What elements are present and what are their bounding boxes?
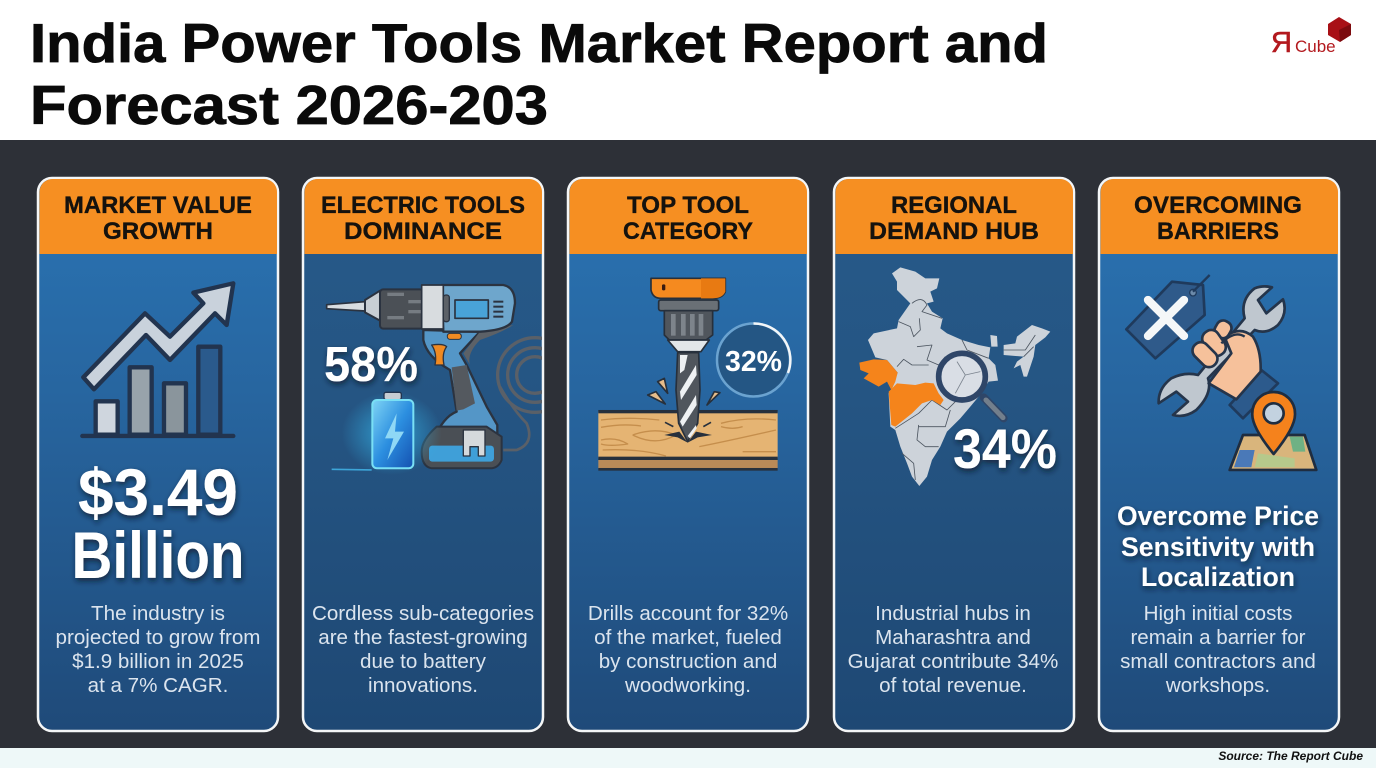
title: India Power Tools Market Report and: [30, 12, 1048, 74]
description: The industry is: [91, 602, 225, 625]
panel header: [1100, 179, 1338, 254]
stat: 58%: 58%: [324, 338, 418, 392]
description: of total revenue.: [879, 674, 1027, 697]
logo: [1271, 17, 1351, 59]
description: woodworking.: [624, 674, 751, 697]
logo: Я: [1271, 27, 1292, 59]
heading: [321, 192, 525, 245]
callout heading: Sensitivity with: [1121, 532, 1315, 562]
heading: CATEGORY: [623, 218, 753, 245]
panel: overcoming barriers: [1099, 178, 1339, 731]
dark panel background: [0, 140, 1376, 748]
title: Forecast 2026-203: [30, 74, 548, 136]
stat: 34%: 34%: [953, 417, 1057, 480]
description: [848, 602, 1058, 697]
heading: DOMINANCE: [344, 218, 502, 245]
description: projected to grow from: [56, 626, 260, 649]
big value: Billion: [72, 518, 244, 592]
heading: DEMAND HUB: [869, 218, 1039, 245]
description: are the fastest-growing: [318, 626, 528, 649]
description: [1120, 602, 1316, 697]
callout heading: Localization: [1141, 562, 1295, 592]
description: [56, 602, 260, 697]
heading: REGIONAL: [891, 192, 1017, 219]
source note: Source: The Report Cube: [1218, 749, 1363, 763]
description: by construction and: [599, 650, 777, 673]
description: Gujarat contribute 34%: [848, 650, 1058, 673]
panel header: [836, 179, 1073, 254]
description: High initial costs: [1144, 602, 1292, 625]
heading: MARKET VALUE: [64, 192, 252, 219]
description: of the market, fueled: [594, 626, 782, 649]
panel: top tool category: [568, 178, 808, 731]
big value: [72, 455, 244, 592]
callout heading: [1117, 501, 1319, 592]
description: Drills account for 32%: [588, 602, 788, 625]
description: due to battery: [360, 650, 487, 673]
description: workshops.: [1165, 674, 1270, 697]
icon: cordless drill and battery: [326, 284, 542, 471]
icon: price tag, wrench in fist, map pin: [1126, 275, 1316, 470]
heading: BARRIERS: [1157, 218, 1279, 245]
description: Cordless sub-categories: [312, 602, 534, 625]
panel: market value growth: [38, 178, 278, 731]
description: innovations.: [368, 674, 478, 697]
icon: growth chart: [82, 283, 233, 436]
big value: $3.49: [78, 455, 238, 529]
icon: India map with magnifier: [859, 267, 1050, 486]
heading: [623, 192, 753, 245]
stat ring: 32%: [717, 323, 790, 396]
panel: regional demand hub: [834, 178, 1074, 731]
description: Maharashtra and: [875, 626, 1031, 649]
description: small contractors and: [1120, 650, 1316, 673]
description: $1.9 billion in 2025: [72, 650, 244, 673]
description: remain a barrier for: [1130, 626, 1306, 649]
heading: OVERCOMING: [1134, 192, 1302, 219]
footer strip: [0, 748, 1376, 768]
description: Industrial hubs in: [875, 602, 1031, 625]
title: [30, 12, 1048, 136]
heading: ELECTRIC TOOLS: [321, 192, 525, 219]
heading: [869, 192, 1039, 245]
heading: GROWTH: [103, 218, 213, 245]
logo: Cube: [1295, 37, 1336, 56]
description: [588, 602, 788, 697]
callout heading: Overcome Price: [1117, 501, 1319, 531]
heading: [64, 192, 252, 245]
panel header: [304, 179, 542, 254]
heading: TOP TOOL: [627, 192, 749, 219]
panel: electric tools dominance: [303, 178, 572, 731]
description: at a 7% CAGR.: [88, 674, 228, 697]
heading: [1134, 192, 1302, 245]
description: [312, 602, 534, 697]
panel header: [570, 179, 807, 254]
panel header: [40, 179, 277, 254]
stat ring: 32%: 32%: [725, 346, 782, 378]
icon: drill bit in wood: [598, 278, 778, 471]
